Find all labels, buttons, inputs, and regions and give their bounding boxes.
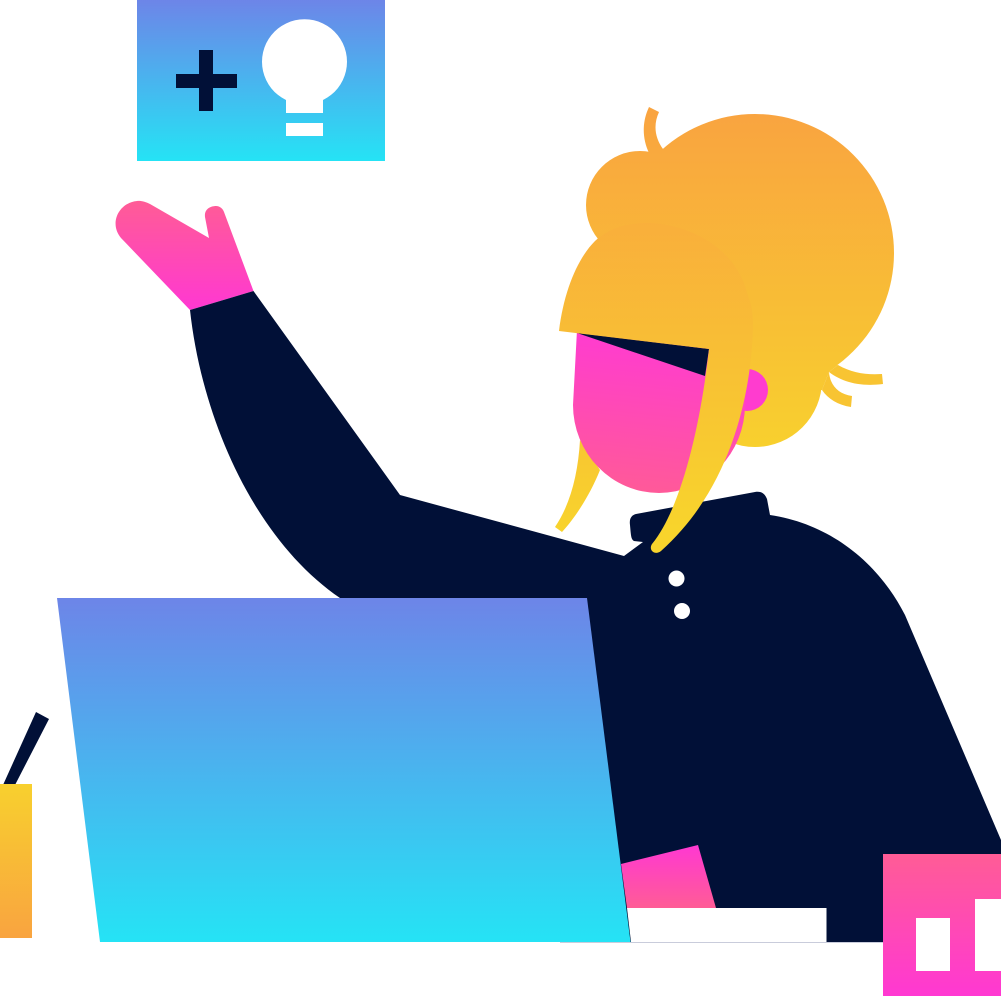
cup [0, 784, 32, 938]
hair fringe and long front lock [559, 223, 753, 553]
body with raised arm and sweater [190, 291, 1001, 942]
hair: back bun and top wisp [586, 107, 894, 447]
chart card [883, 854, 1001, 996]
sweater buttons [668, 570, 690, 619]
dark eye band [577, 333, 709, 376]
raised hand [116, 201, 254, 310]
face [573, 330, 750, 493]
icon card: plus and light bulb [137, 0, 385, 161]
laptop screen [57, 598, 630, 942]
icon: light bulb [262, 19, 347, 136]
icon: plus sign [176, 50, 237, 111]
pen [3, 712, 49, 785]
lower hand [621, 845, 716, 908]
desk line [560, 942, 883, 943]
ear [726, 369, 768, 411]
left hair lock [555, 440, 600, 532]
bar chart icons [916, 899, 1001, 971]
white keyboard [627, 908, 826, 942]
